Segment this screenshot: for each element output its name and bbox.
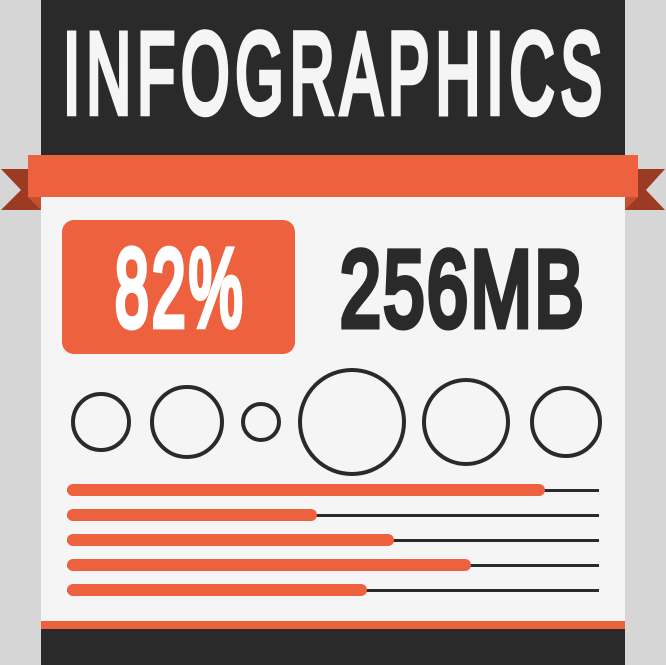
ribbon [1,155,665,210]
stat badge: 82%: 82% [115,227,243,350]
ribbon band [28,155,638,197]
header band [41,0,625,155]
progress bars [67,484,599,596]
bar 2 [67,509,599,521]
page panel [41,197,625,621]
title: INFOGRAPHICS [63,8,602,138]
stat: 256MB: 256MB [340,228,583,349]
stat badge: 82% [62,220,295,354]
ribbon right tail [625,169,665,210]
bar 3 [67,534,599,546]
footer band [41,621,625,665]
bar 5 [67,584,599,596]
bar 4 [67,559,599,571]
circles row [73,370,600,474]
ribbon left tail [1,169,41,210]
bar 1 [67,484,599,496]
